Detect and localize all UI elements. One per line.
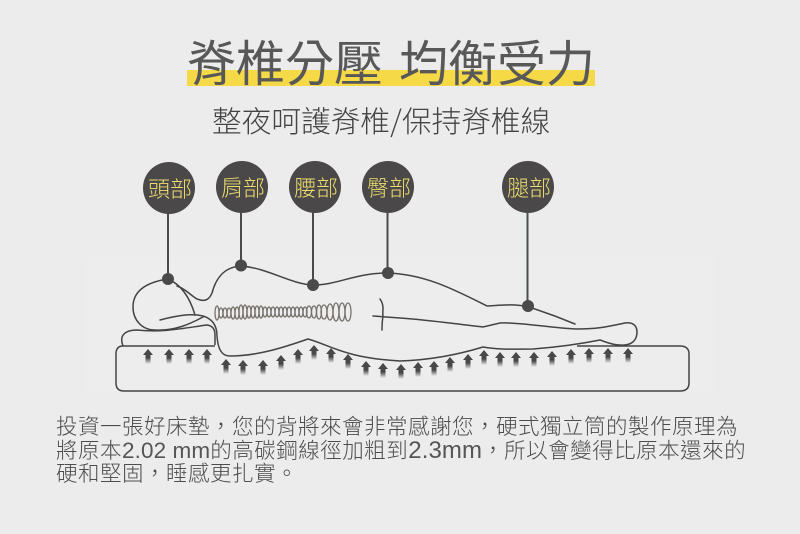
- mattress outline: [116, 346, 689, 391]
- title: 脊椎分壓: [187, 25, 383, 96]
- body text: [56, 410, 746, 488]
- callout: head: [143, 162, 195, 285]
- callout: waist: [289, 161, 341, 291]
- subtitle: 整夜呵護脊椎/保持脊椎線: [212, 98, 550, 141]
- pillow: [122, 325, 215, 346]
- callout: waist: 腰部: [294, 171, 338, 203]
- body silhouette: [133, 266, 637, 361]
- diagram backdrop: [85, 258, 715, 394]
- callout: hip: 臀部: [367, 171, 411, 203]
- callout: leg: 腿部: [507, 171, 551, 203]
- body text: 投資一張好床墊，您的背將來會非常感謝您，硬式獨立筒的製作原理為: [56, 410, 738, 441]
- title: [187, 25, 595, 96]
- callout: leg: [502, 161, 554, 312]
- callout: shoulder: [216, 161, 268, 272]
- spine spring: [215, 303, 351, 321]
- title highlight bar: [187, 70, 595, 86]
- body text: 硬和堅固，睡感更扎實。: [56, 457, 298, 488]
- callout: head: 頭部: [148, 172, 192, 204]
- pressure arrows: [143, 345, 633, 379]
- callout: shoulder: 肩部: [221, 171, 265, 203]
- body text: 將原本2.02 mm的高碳鋼線徑加粗到2.3mm，所以會變得比原本還來的: [56, 434, 746, 465]
- callout: hip: [362, 161, 414, 279]
- title: 均衡受力: [399, 25, 595, 96]
